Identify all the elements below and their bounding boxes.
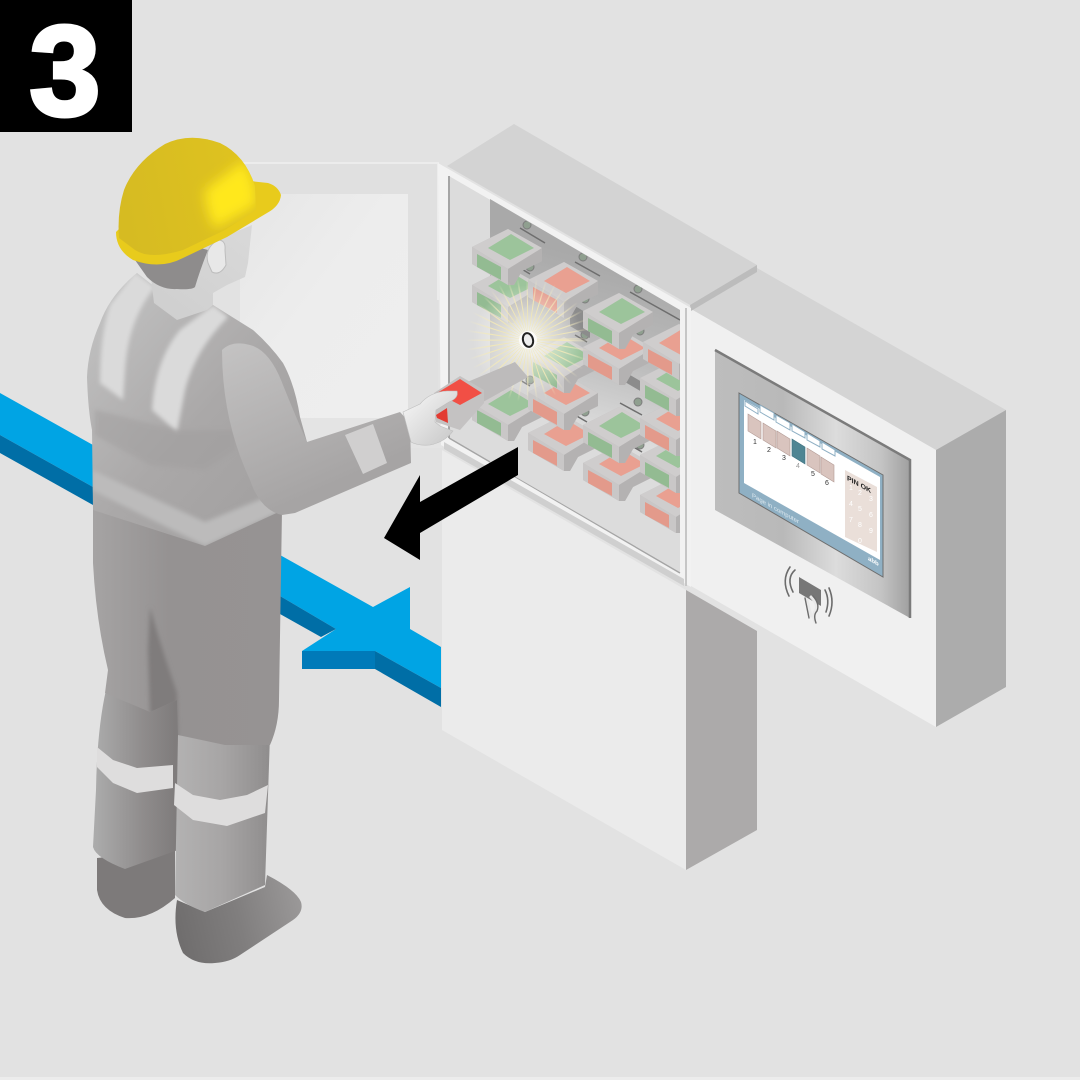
front leg reflective band: [174, 783, 268, 826]
open cabinet door: [240, 163, 442, 448]
lock numbers on display: 6: [825, 480, 829, 487]
steel bezel: [715, 350, 910, 618]
pulled-out red key module: [434, 362, 528, 430]
ear: [207, 240, 226, 273]
display tabs: [745, 401, 835, 456]
rear leg reflective band: [97, 747, 173, 793]
worker: [87, 138, 457, 963]
right cabinet housing: [691, 268, 1006, 727]
hair: [135, 240, 208, 289]
key lock modules: [472, 220, 680, 533]
keypad digits: 6: [869, 512, 873, 519]
cabinet pedestal: [442, 450, 757, 870]
floor direction arrow: blue: [0, 393, 441, 707]
lock numbers on display: 3: [782, 455, 786, 462]
back panel: [490, 199, 680, 572]
column 3 modules: [583, 452, 650, 501]
front boot: [175, 875, 302, 963]
keypad digits: 4: [849, 501, 853, 508]
main cabinet with open door: [438, 124, 757, 587]
slot lines: [520, 228, 680, 452]
display area: [744, 400, 880, 560]
arm: [222, 343, 411, 515]
hat highlight: [205, 160, 256, 228]
PIN keypad: [845, 470, 877, 552]
keypad digits: 5: [858, 506, 862, 513]
lock numbers on display: 2: [767, 447, 771, 454]
frame lower ledge: [444, 442, 684, 586]
vest reflective bands: [92, 272, 283, 546]
keypad digits: 9: [869, 528, 873, 535]
display logo: abb: [868, 555, 879, 568]
empty slots: [570, 303, 642, 392]
lock numbers on display: 1: [753, 439, 757, 446]
column 2 modules: [528, 421, 594, 471]
hard hat: [116, 138, 281, 265]
trousers: [93, 500, 282, 745]
lock numbers on display: [753, 439, 829, 487]
inner wall: [449, 176, 680, 573]
front lower leg: [175, 735, 270, 912]
cabinet top: [447, 124, 757, 305]
keypad digits: 0: [858, 538, 862, 545]
lock numbers on display: 5: [811, 471, 815, 478]
PIN label: PIN OK: [847, 473, 872, 495]
column 4 modules: [640, 484, 680, 533]
hat brim: [116, 181, 281, 265]
step number badge: 3: [29, 0, 101, 143]
face and neck: [150, 225, 252, 320]
column 1 modules: [472, 385, 542, 441]
keypad digits: 7: [849, 517, 853, 524]
hat dome: [119, 138, 256, 255]
step number badge: [0, 0, 132, 143]
rear lower leg: [93, 690, 178, 869]
lock numbers on display: 4: [796, 463, 800, 470]
sleeve reflective band: [345, 424, 387, 474]
keypad digits: 2: [858, 490, 862, 497]
fixing studs: [523, 221, 644, 449]
indicator light burst: [473, 285, 583, 395]
lock grids on display: [748, 414, 834, 482]
keypad digits: [849, 485, 873, 545]
touch screen terminal: [715, 350, 910, 618]
rear boot: [97, 850, 175, 918]
icon: contactless card reader: [785, 567, 832, 623]
keypad digits: 3: [869, 496, 873, 503]
cabinet front frame: [438, 163, 691, 587]
keypad digits: 8: [858, 522, 862, 529]
keypad digits: 1: [849, 485, 853, 492]
hand: [403, 391, 457, 445]
display footer: Page in computer: [752, 492, 800, 526]
torso: [87, 273, 307, 546]
display frame: [739, 393, 883, 577]
removal direction arrow: black: [384, 447, 518, 560]
